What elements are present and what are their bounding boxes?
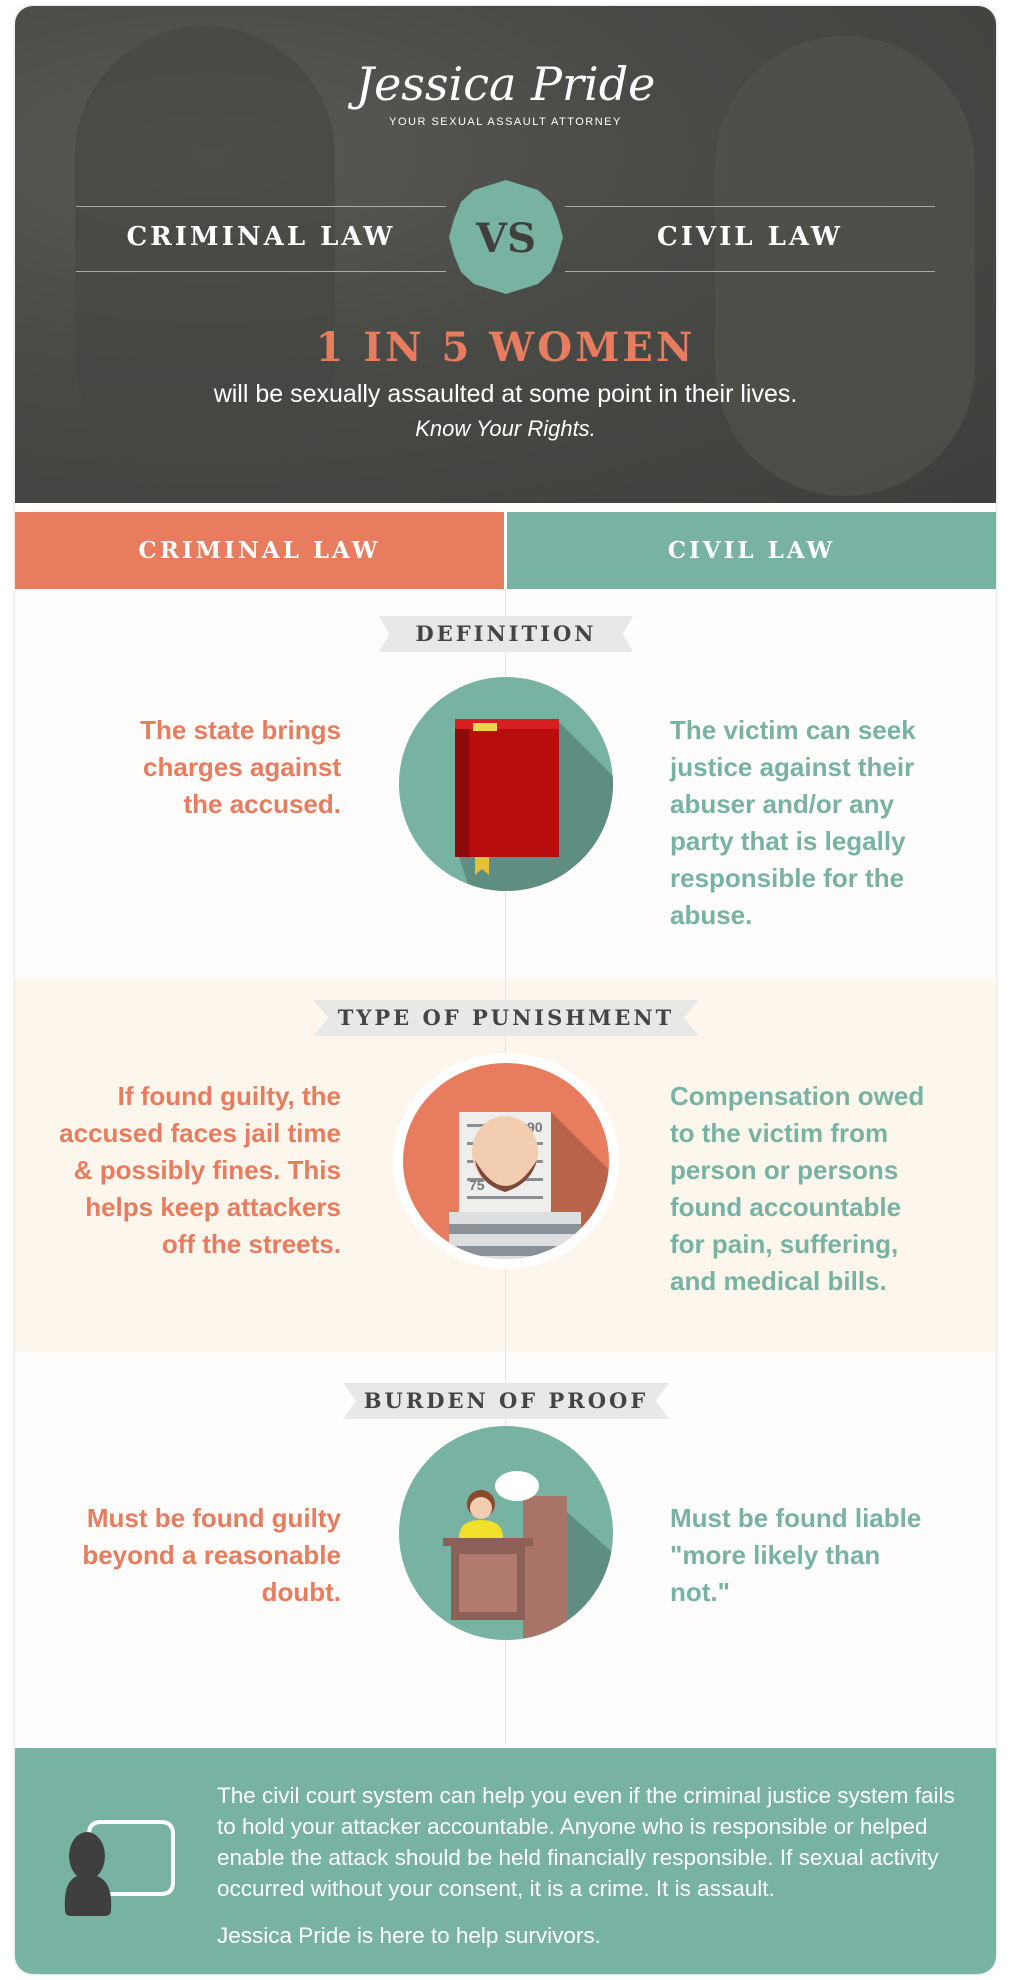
definition left: [140, 715, 341, 819]
vs row: CRIMINAL LAW: [126, 222, 396, 252]
icon: book: [399, 677, 613, 891]
center divider: [505, 589, 506, 1744]
punishment bg: [15, 980, 996, 1352]
footer text: to hold your attacker accountable. Anyone who is responsible or helped: [217, 1814, 927, 1839]
burden left: Must be found guilty: [87, 1503, 341, 1533]
hero photo shading: [75, 26, 335, 486]
punishment right: Compensation owed: [670, 1081, 924, 1111]
icon: witness stand: [399, 1426, 613, 1640]
burden right: Must be found liable: [670, 1503, 921, 1533]
tag: definition: DEFINITION: [416, 621, 596, 646]
header bars: [15, 512, 504, 589]
logo: Jessica Pride: [356, 57, 655, 111]
stat: will be sexually assaulted at some point in their lives.: [214, 380, 797, 408]
punishment right: and medical bills.: [670, 1266, 887, 1296]
tag: definition: [379, 616, 633, 652]
punishment right: person or persons: [670, 1155, 898, 1185]
definition right: The victim can seek: [670, 715, 916, 745]
tag: punishment: TYPE OF PUNISHMENT: [338, 1005, 674, 1030]
definition left: The state brings: [140, 715, 341, 745]
stat: 1 IN 5 WOMEN: [316, 324, 695, 371]
definition left: charges against: [143, 752, 341, 782]
punishment right: to the victim from: [670, 1118, 888, 1148]
definition left: the accused.: [183, 789, 341, 819]
vs row: [76, 206, 935, 272]
footer: [15, 1748, 996, 1974]
punishment left: & possibly fines. This: [74, 1155, 341, 1185]
icon: prisoner: [393, 1053, 619, 1269]
punishment right: found accountable: [670, 1192, 901, 1222]
footer text: Jessica Pride is here to help survivors.: [217, 1923, 601, 1948]
vs badge: [449, 180, 563, 294]
footer text: The civil court system can help you even if the criminal justice system fails: [217, 1783, 955, 1808]
punishment left: accused faces jail time: [59, 1118, 341, 1148]
logo: YOUR SEXUAL ASSAULT ATTORNEY: [389, 116, 622, 128]
vs row: CIVIL LAW: [657, 222, 843, 252]
footer text: [217, 1783, 955, 1948]
definition right: abuser and/or any: [670, 789, 894, 819]
header bars: CRIMINAL LAW: [138, 537, 381, 564]
footer text: enable the attack should be held financially responsible. If sexual activity: [217, 1845, 939, 1870]
definition right: abuse.: [670, 900, 752, 930]
definition right: responsible for the: [670, 863, 904, 893]
footer text: occurred without your consent, it is a crime. It is assault.: [217, 1876, 775, 1901]
punishment left: helps keep attackers: [85, 1192, 341, 1222]
burden left: doubt.: [262, 1577, 341, 1607]
burden left: [82, 1503, 341, 1607]
tag: burden: BURDEN OF PROOF: [364, 1388, 648, 1413]
punishment left: [59, 1081, 341, 1259]
punishment left: off the streets.: [162, 1229, 341, 1259]
card frame: CIVIL LAW: [668, 537, 835, 564]
icon: person speech: [64, 1820, 175, 1916]
burden right: "more likely than: [670, 1540, 880, 1570]
punishment right: [670, 1081, 924, 1296]
punishment left: If found guilty, the: [118, 1081, 341, 1111]
vs badge: VS: [475, 215, 536, 262]
icon: prisoner: 90: [527, 1119, 543, 1135]
definition right: [670, 715, 916, 930]
hero: [15, 6, 996, 503]
definition right: party that is legally: [670, 826, 906, 856]
burden left: beyond a reasonable: [82, 1540, 341, 1570]
tag: burden: [343, 1383, 669, 1419]
burden right: not.": [670, 1577, 730, 1607]
burden right: [670, 1503, 921, 1607]
stat: [214, 324, 797, 441]
punishment right: for pain, suffering,: [670, 1229, 898, 1259]
stat: Know Your Rights.: [415, 416, 596, 441]
icon: prisoner: 75: [469, 1177, 485, 1193]
tag: punishment: [313, 1000, 699, 1036]
definition right: justice against their: [670, 752, 914, 782]
